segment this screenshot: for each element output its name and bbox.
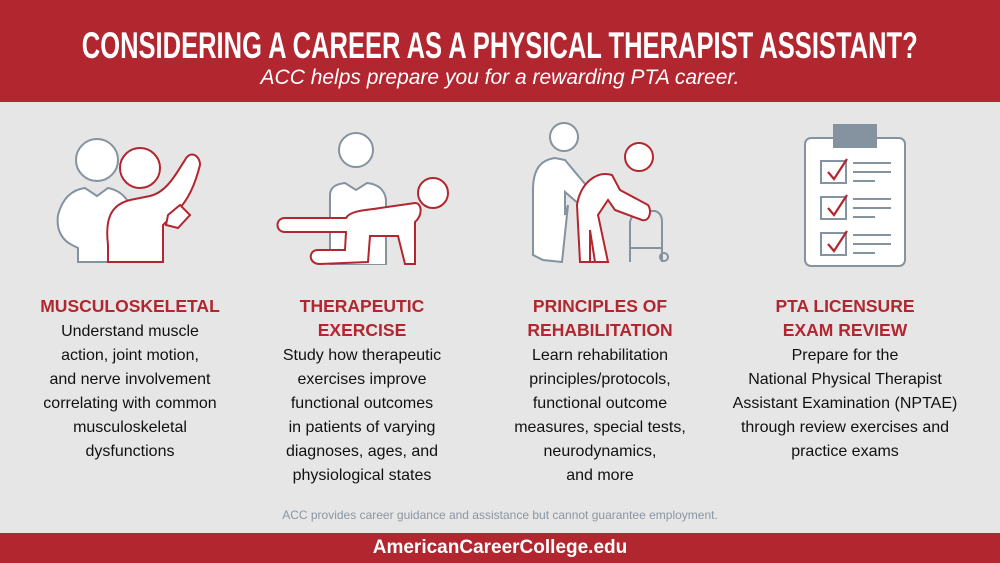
panel: PTA licensure exam review: practice exams [791,443,899,460]
panel: principles of rehabilitation: and more [566,467,634,484]
panel: musculoskeletal: and nerve involvement [50,371,210,388]
panel: PTA licensure exam review: EXAM REVIEW [783,320,907,340]
panel: principles of rehabilitation: principles/protocols, [529,371,671,388]
panel: therapeutic exercise: exercises improve [298,371,426,388]
panel: PTA licensure exam review: Assistant Examination (NPTAE) [733,395,957,412]
panel: therapeutic exercise: physiological states [293,467,431,484]
panel: principles of rehabilitation [514,296,686,484]
panel: therapeutic exercise: functional outcomes [291,395,433,412]
panel: PTA licensure exam review [732,296,957,460]
panel: therapeutic exercise: EXERCISE [318,320,406,340]
panel: musculoskeletal [40,296,220,460]
panel: musculoskeletal: MUSCULOSKELETAL [40,296,220,316]
panel: PTA licensure exam review: National Physical Therapist [748,371,942,388]
panel: PTA licensure exam review: through review exercises and [741,419,949,436]
panel: principles of rehabilitation: REHABILITATION [527,320,673,340]
panel: therapeutic exercise: diagnoses, ages, and [286,443,438,460]
panel: musculoskeletal: musculoskeletal [73,419,187,436]
panel: musculoskeletal: action, joint motion, [61,347,199,364]
title: CONSIDERING A CAREER AS A PHYSICAL THERAPIST ASSISTANT? [82,25,918,66]
panel: therapeutic exercise [283,296,441,484]
icon: rehabilitation [532,122,669,264]
panel: principles of rehabilitation: measures, special tests, [514,419,686,436]
panel: PTA licensure exam review: PTA LICENSURE [775,296,915,316]
panel: principles of rehabilitation: functional outcome [533,395,667,412]
icon: musculoskeletal [56,138,201,263]
panel: principles of rehabilitation: neurodynamics, [544,443,656,460]
subtitle: ACC helps prepare you for a rewarding PTA career. [261,66,739,89]
panel: therapeutic exercise: in patients of varying [289,419,435,436]
footer: AmericanCareerCollege.edu [373,537,627,558]
panel: musculoskeletal: correlating with common [43,395,217,412]
footer [0,533,1000,563]
header band [0,0,1000,102]
panel: principles of rehabilitation: PRINCIPLES OF [533,296,667,316]
panel: musculoskeletal: dysfunctions [86,443,174,460]
panel: principles of rehabilitation: Learn rehabilitation [532,347,668,364]
icon: clipboard checklist [804,124,906,267]
panel: therapeutic exercise: THERAPEUTIC [300,296,424,316]
panel: PTA licensure exam review: Prepare for the [792,347,898,364]
icon: therapeutic exercise [276,132,449,265]
disclaimer: ACC provides career guidance and assistance but cannot guarantee employment. [282,508,718,522]
panel: musculoskeletal: Understand muscle [61,323,199,340]
panel: therapeutic exercise: Study how therapeutic [283,347,441,364]
